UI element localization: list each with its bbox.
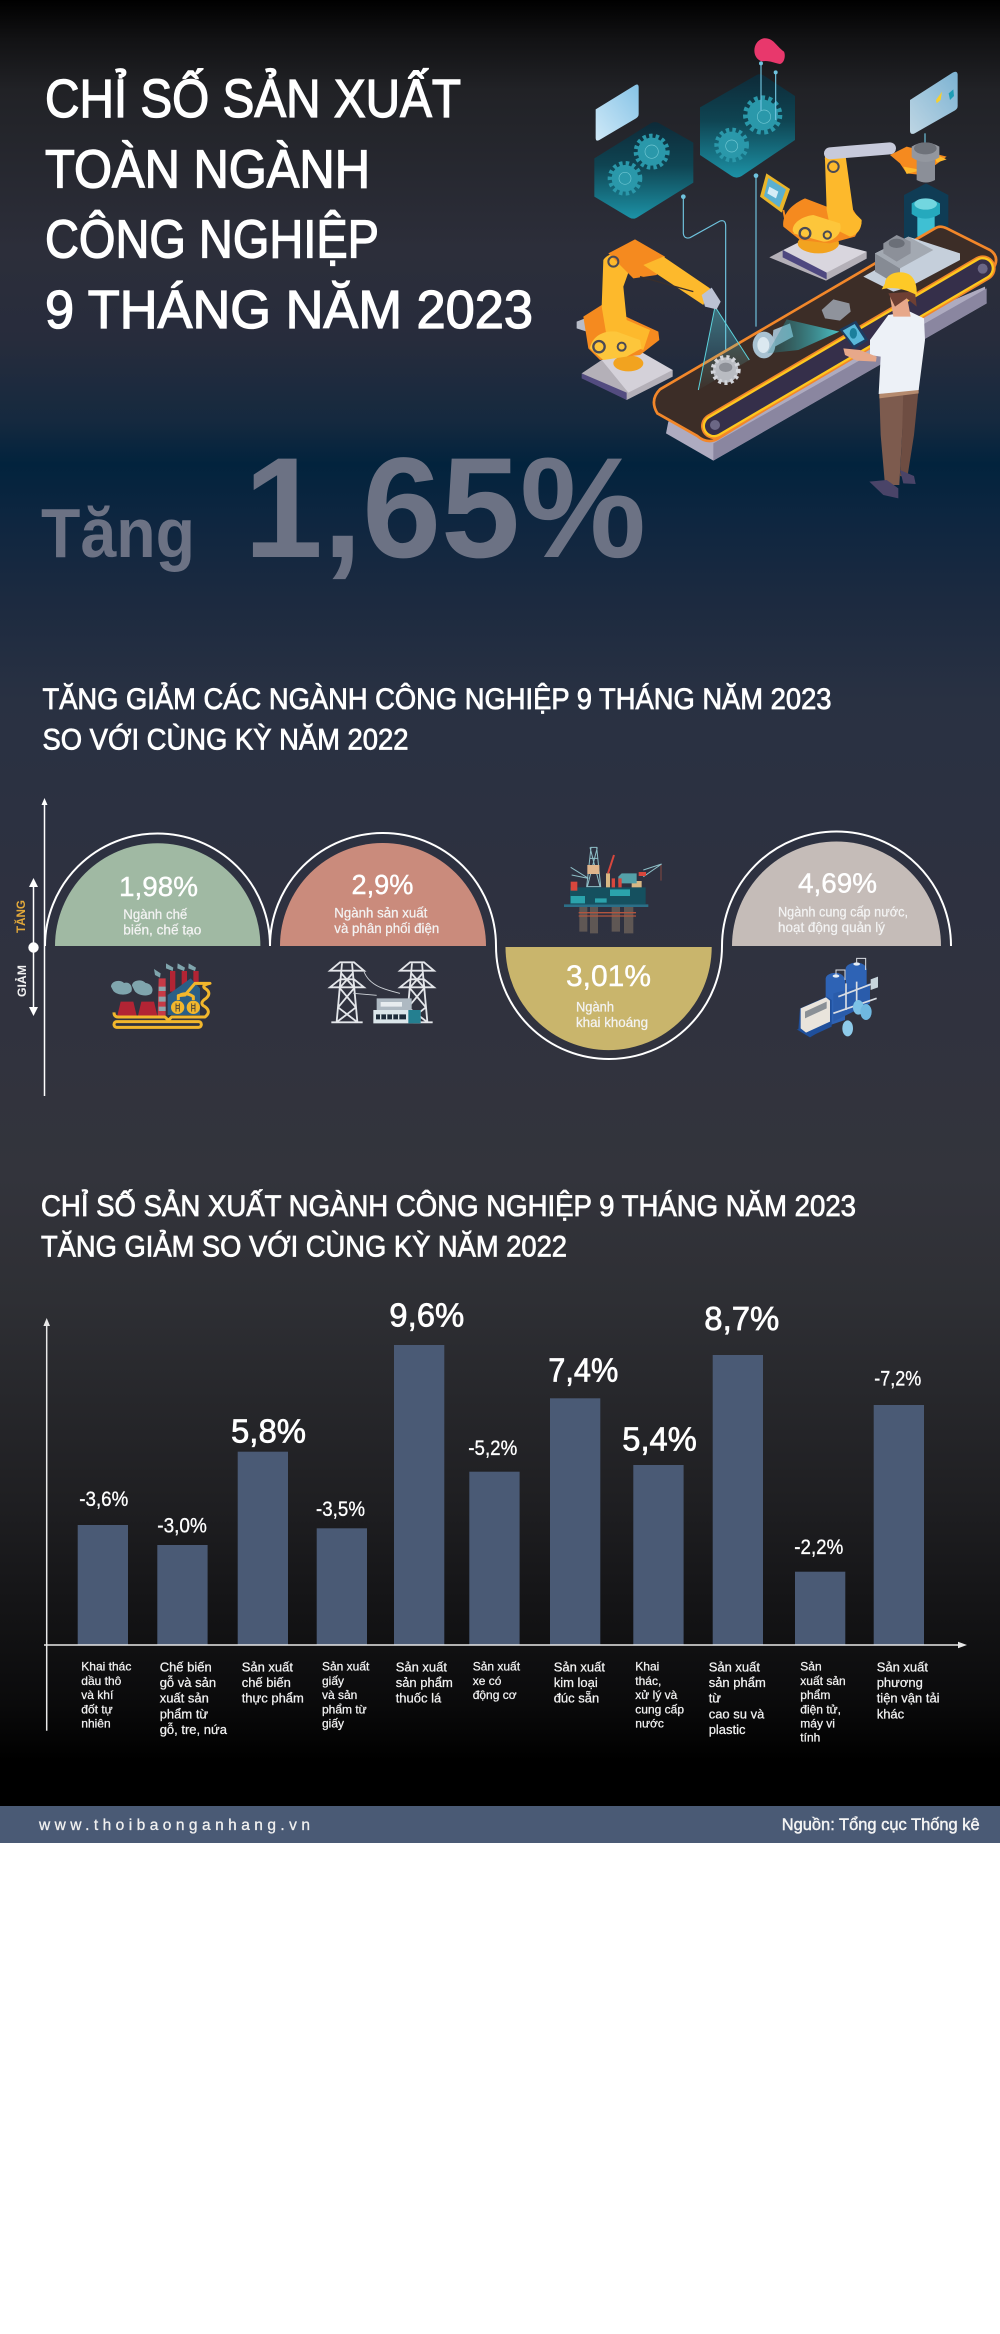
category labels: điện tử, xyxy=(800,1702,841,1716)
category labels: chế biến xyxy=(242,1675,291,1690)
wave outline around semicircles xyxy=(45,832,951,1059)
heading: section 2: SO VỚI CÙNG KỲ NĂM 2022 xyxy=(42,724,408,756)
category labels: Sản xuất xyxy=(473,1660,521,1674)
up-down indicator: TĂNG / GIẢM: GIẢM xyxy=(14,965,29,997)
category labels: phẩm từ xyxy=(160,1706,208,1721)
category labels: xe có xyxy=(473,1674,502,1688)
value labels: -3,5% xyxy=(316,1498,365,1521)
category labels: Khai thác xyxy=(81,1660,131,1674)
category labels: phẩm từ xyxy=(322,1702,367,1716)
category labels: Sản xyxy=(800,1660,822,1674)
scan cone from robot xyxy=(698,307,749,390)
worker xyxy=(839,272,925,498)
category labels: tiện vận tải xyxy=(877,1691,940,1706)
category labels: xử lý và xyxy=(635,1688,678,1702)
category labels: xuất sản xyxy=(160,1691,209,1706)
semicircle: manufacturing: 1,98% xyxy=(119,871,198,902)
big number: Tăng 1,65% xyxy=(41,429,646,588)
value labels: -3,0% xyxy=(157,1515,207,1538)
nut on conveyor xyxy=(822,299,851,321)
category labels: thực phẩm xyxy=(242,1691,304,1706)
category labels: sản phẩm xyxy=(396,1675,453,1690)
value labels: 5,4% xyxy=(622,1421,697,1458)
semicircle: manufacturing xyxy=(55,843,260,946)
category labels: Sản xuất xyxy=(877,1659,928,1674)
footer band xyxy=(0,1806,1000,1843)
heading: section 2 xyxy=(42,682,832,756)
value labels: 5,8% xyxy=(231,1413,306,1450)
semicircle: electricity: Ngành sản xuất xyxy=(334,905,427,921)
category labels xyxy=(81,1659,940,1744)
category labels: thuốc lá xyxy=(396,1691,442,1706)
category labels: phương xyxy=(877,1675,923,1690)
title: 9 THÁNG NĂM 2023 xyxy=(45,280,533,340)
semicircle: manufacturing: biến, chế tạo xyxy=(123,922,202,938)
hologram panel with gears centre xyxy=(700,74,795,178)
heading: section 3: TĂNG GIẢM SO VỚI CÙNG KỲ NĂM 2022 xyxy=(41,1230,567,1264)
info card left xyxy=(596,85,639,141)
tablet on robot xyxy=(760,173,793,233)
semicircle: water supply: 4,69% xyxy=(798,868,877,899)
icon: power pylons and substation xyxy=(330,962,434,1023)
category labels: plastic xyxy=(709,1722,746,1737)
background panel xyxy=(0,0,1000,1806)
semicircle: mining: Ngành xyxy=(576,999,614,1015)
category labels: giấy xyxy=(322,1716,344,1730)
category labels: phẩm xyxy=(800,1688,830,1702)
gear on conveyor xyxy=(713,357,738,383)
category labels: gỗ, tre, nứa xyxy=(160,1722,228,1737)
footer band: Nguồn: Tổng cục Thống kê xyxy=(782,1815,980,1834)
semicircle: mining: khai khoáng xyxy=(576,1014,648,1030)
category labels: kim loại xyxy=(554,1675,598,1690)
category labels: nhiên xyxy=(81,1716,111,1730)
grey block with nut xyxy=(863,235,960,292)
category labels: khác xyxy=(877,1706,905,1721)
up-down indicator: TĂNG / GIẢM xyxy=(13,878,39,1016)
value labels: -7,2% xyxy=(874,1368,921,1391)
semicircle: water supply: hoạt động quản lý xyxy=(778,919,885,935)
category labels: động cơ xyxy=(473,1688,517,1702)
semicircle: mining: 3,01% xyxy=(566,960,651,993)
info card right xyxy=(910,72,958,134)
semicircle: electricity: và phân phối điện xyxy=(334,920,439,936)
heading: section 3: CHỈ SỐ SẢN XUẤT NGÀNH CÔNG NGHIỆP 9 THÁNG NĂM 2023 xyxy=(41,1189,856,1223)
vertical axis xyxy=(42,798,48,1096)
title: CHỈ SỐ SẢN XUẤT xyxy=(45,69,461,129)
category labels: Sản xuất xyxy=(322,1660,370,1674)
chart axes xyxy=(44,1322,960,1731)
bolt on conveyor xyxy=(753,323,793,358)
value labels: -2,2% xyxy=(794,1536,843,1559)
bar chart xyxy=(43,1297,967,1744)
category labels: cung cấp xyxy=(635,1702,684,1716)
category labels: gỗ và sản xyxy=(160,1675,216,1690)
bolt held by robot xyxy=(912,142,939,182)
value labels xyxy=(79,1297,921,1559)
robot arm lower left xyxy=(577,239,721,400)
heading: section 3 xyxy=(41,1189,856,1264)
category labels: cao su và xyxy=(709,1706,765,1721)
hologram panel with gears left xyxy=(594,122,693,219)
scan beam from tablet xyxy=(767,319,839,353)
category labels: tính xyxy=(800,1730,820,1744)
category labels: dầu thô xyxy=(81,1674,122,1688)
connector lines xyxy=(683,63,925,350)
category labels: và sản xyxy=(322,1688,357,1702)
category labels: từ xyxy=(709,1691,721,1706)
value labels: 9,6% xyxy=(389,1297,464,1334)
semicircle: water supply: Ngành cung cấp nước, xyxy=(778,904,908,920)
icon: factory xyxy=(111,963,210,1027)
category labels: và khí xyxy=(81,1688,114,1702)
icon: water treatment xyxy=(797,958,878,1037)
category labels: Sản xuất xyxy=(709,1659,760,1674)
heading: section 2: TĂNG GIẢM CÁC NGÀNH CÔNG NGHIỆP 9 THÁNG NĂM 2023 xyxy=(42,682,832,716)
category labels: nước xyxy=(635,1716,664,1730)
semicircle: mining xyxy=(506,947,712,1050)
big number: Tăng 1,65%: Tăng xyxy=(41,494,195,572)
title xyxy=(45,69,533,340)
value labels: 7,4% xyxy=(548,1352,618,1389)
bars xyxy=(78,1345,924,1645)
footer band: www.thoibaonganhang.vn xyxy=(38,1817,310,1834)
value labels: -5,2% xyxy=(468,1437,517,1460)
robot arm upper right xyxy=(769,147,947,281)
up-down indicator: TĂNG / GIẢM: TĂNG xyxy=(13,900,28,933)
category labels: Sản xuất xyxy=(396,1659,447,1674)
category labels: thác, xyxy=(635,1674,661,1688)
category labels: máy vi xyxy=(800,1716,835,1730)
semicircle: manufacturing: Ngành chế xyxy=(123,906,188,922)
category labels: giấy xyxy=(322,1674,344,1688)
illustration: robot arms, conveyor and worker xyxy=(577,38,996,498)
title: TOÀN NGÀNH xyxy=(45,140,370,200)
semicircle: electricity: 2,9% xyxy=(352,869,414,900)
category labels: đúc sẵn xyxy=(554,1691,599,1706)
value labels: 8,7% xyxy=(704,1300,779,1337)
pink bolt xyxy=(754,38,785,74)
big number: Tăng 1,65%: 1,65% xyxy=(244,429,646,588)
value labels: -3,6% xyxy=(79,1488,128,1511)
category labels: Sản xuất xyxy=(554,1659,605,1674)
category labels: sản phẩm xyxy=(709,1675,766,1690)
title: CÔNG NGHIỆP xyxy=(45,210,379,270)
icon: oil rig xyxy=(564,847,662,933)
semicircle: water supply xyxy=(732,842,941,946)
category labels: Sản xuất xyxy=(242,1659,293,1674)
category labels: Chế biến xyxy=(160,1659,212,1674)
hologram base with teal bolt xyxy=(904,183,948,240)
conveyor base xyxy=(666,287,987,461)
conveyor belt xyxy=(654,227,996,441)
semicircle: electricity xyxy=(280,843,486,946)
category labels: đốt tự xyxy=(81,1702,113,1716)
category labels: Khai xyxy=(635,1660,659,1674)
category labels: xuất sản xyxy=(800,1674,846,1688)
